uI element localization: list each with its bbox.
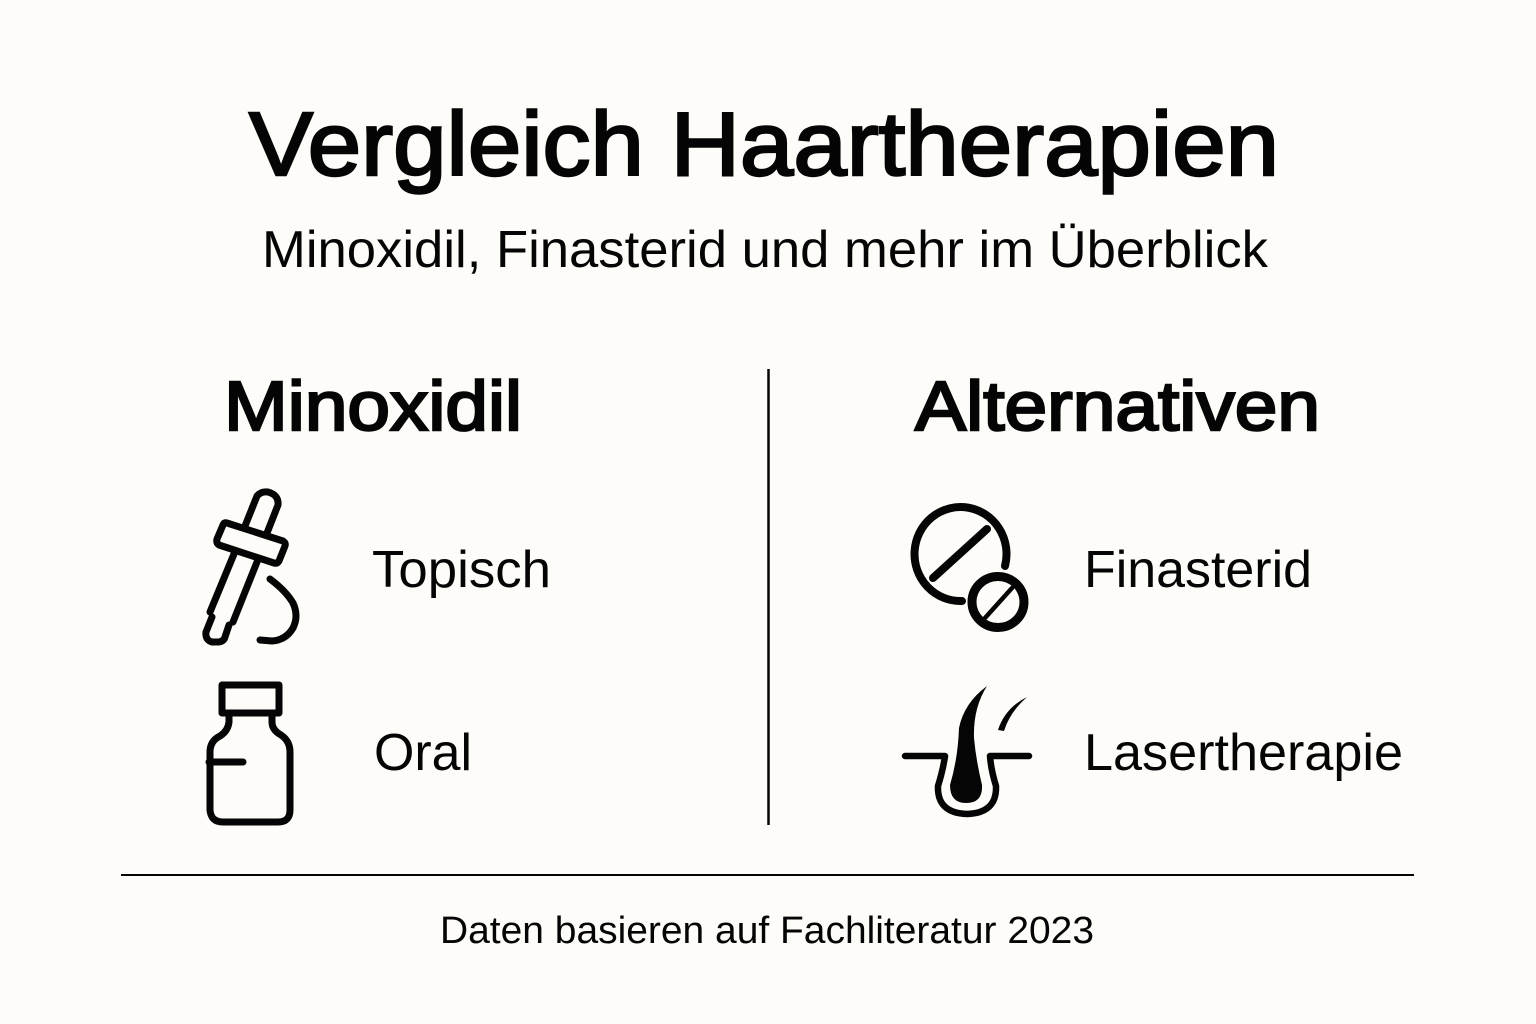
label: Topisch: Topisch [372, 541, 551, 599]
label: Lasertherapie: Lasertherapie [1084, 724, 1403, 782]
title: Vergleich Haartherapien [249, 95, 1279, 195]
column divider [767, 369, 770, 825]
panel: Minoxidil [206, 367, 551, 822]
footer note: Daten basieren auf Fachliteratur 2023 [440, 910, 1094, 952]
icon: hair follicle [905, 686, 1029, 814]
panel: Alternativen [905, 367, 1403, 814]
icon: bottle [209, 685, 290, 822]
label: Oral: Oral [374, 724, 472, 782]
footer rule [121, 874, 1414, 876]
heading: Alternativen: Alternativen [915, 367, 1320, 445]
icon: pills [915, 507, 1024, 628]
subtitle: Minoxidil, Finasterid und mehr im Überblick [262, 221, 1269, 279]
icon: dropper [206, 492, 296, 642]
heading: Minoxidil: Minoxidil [224, 367, 522, 445]
label: Finasterid: Finasterid [1084, 541, 1312, 599]
